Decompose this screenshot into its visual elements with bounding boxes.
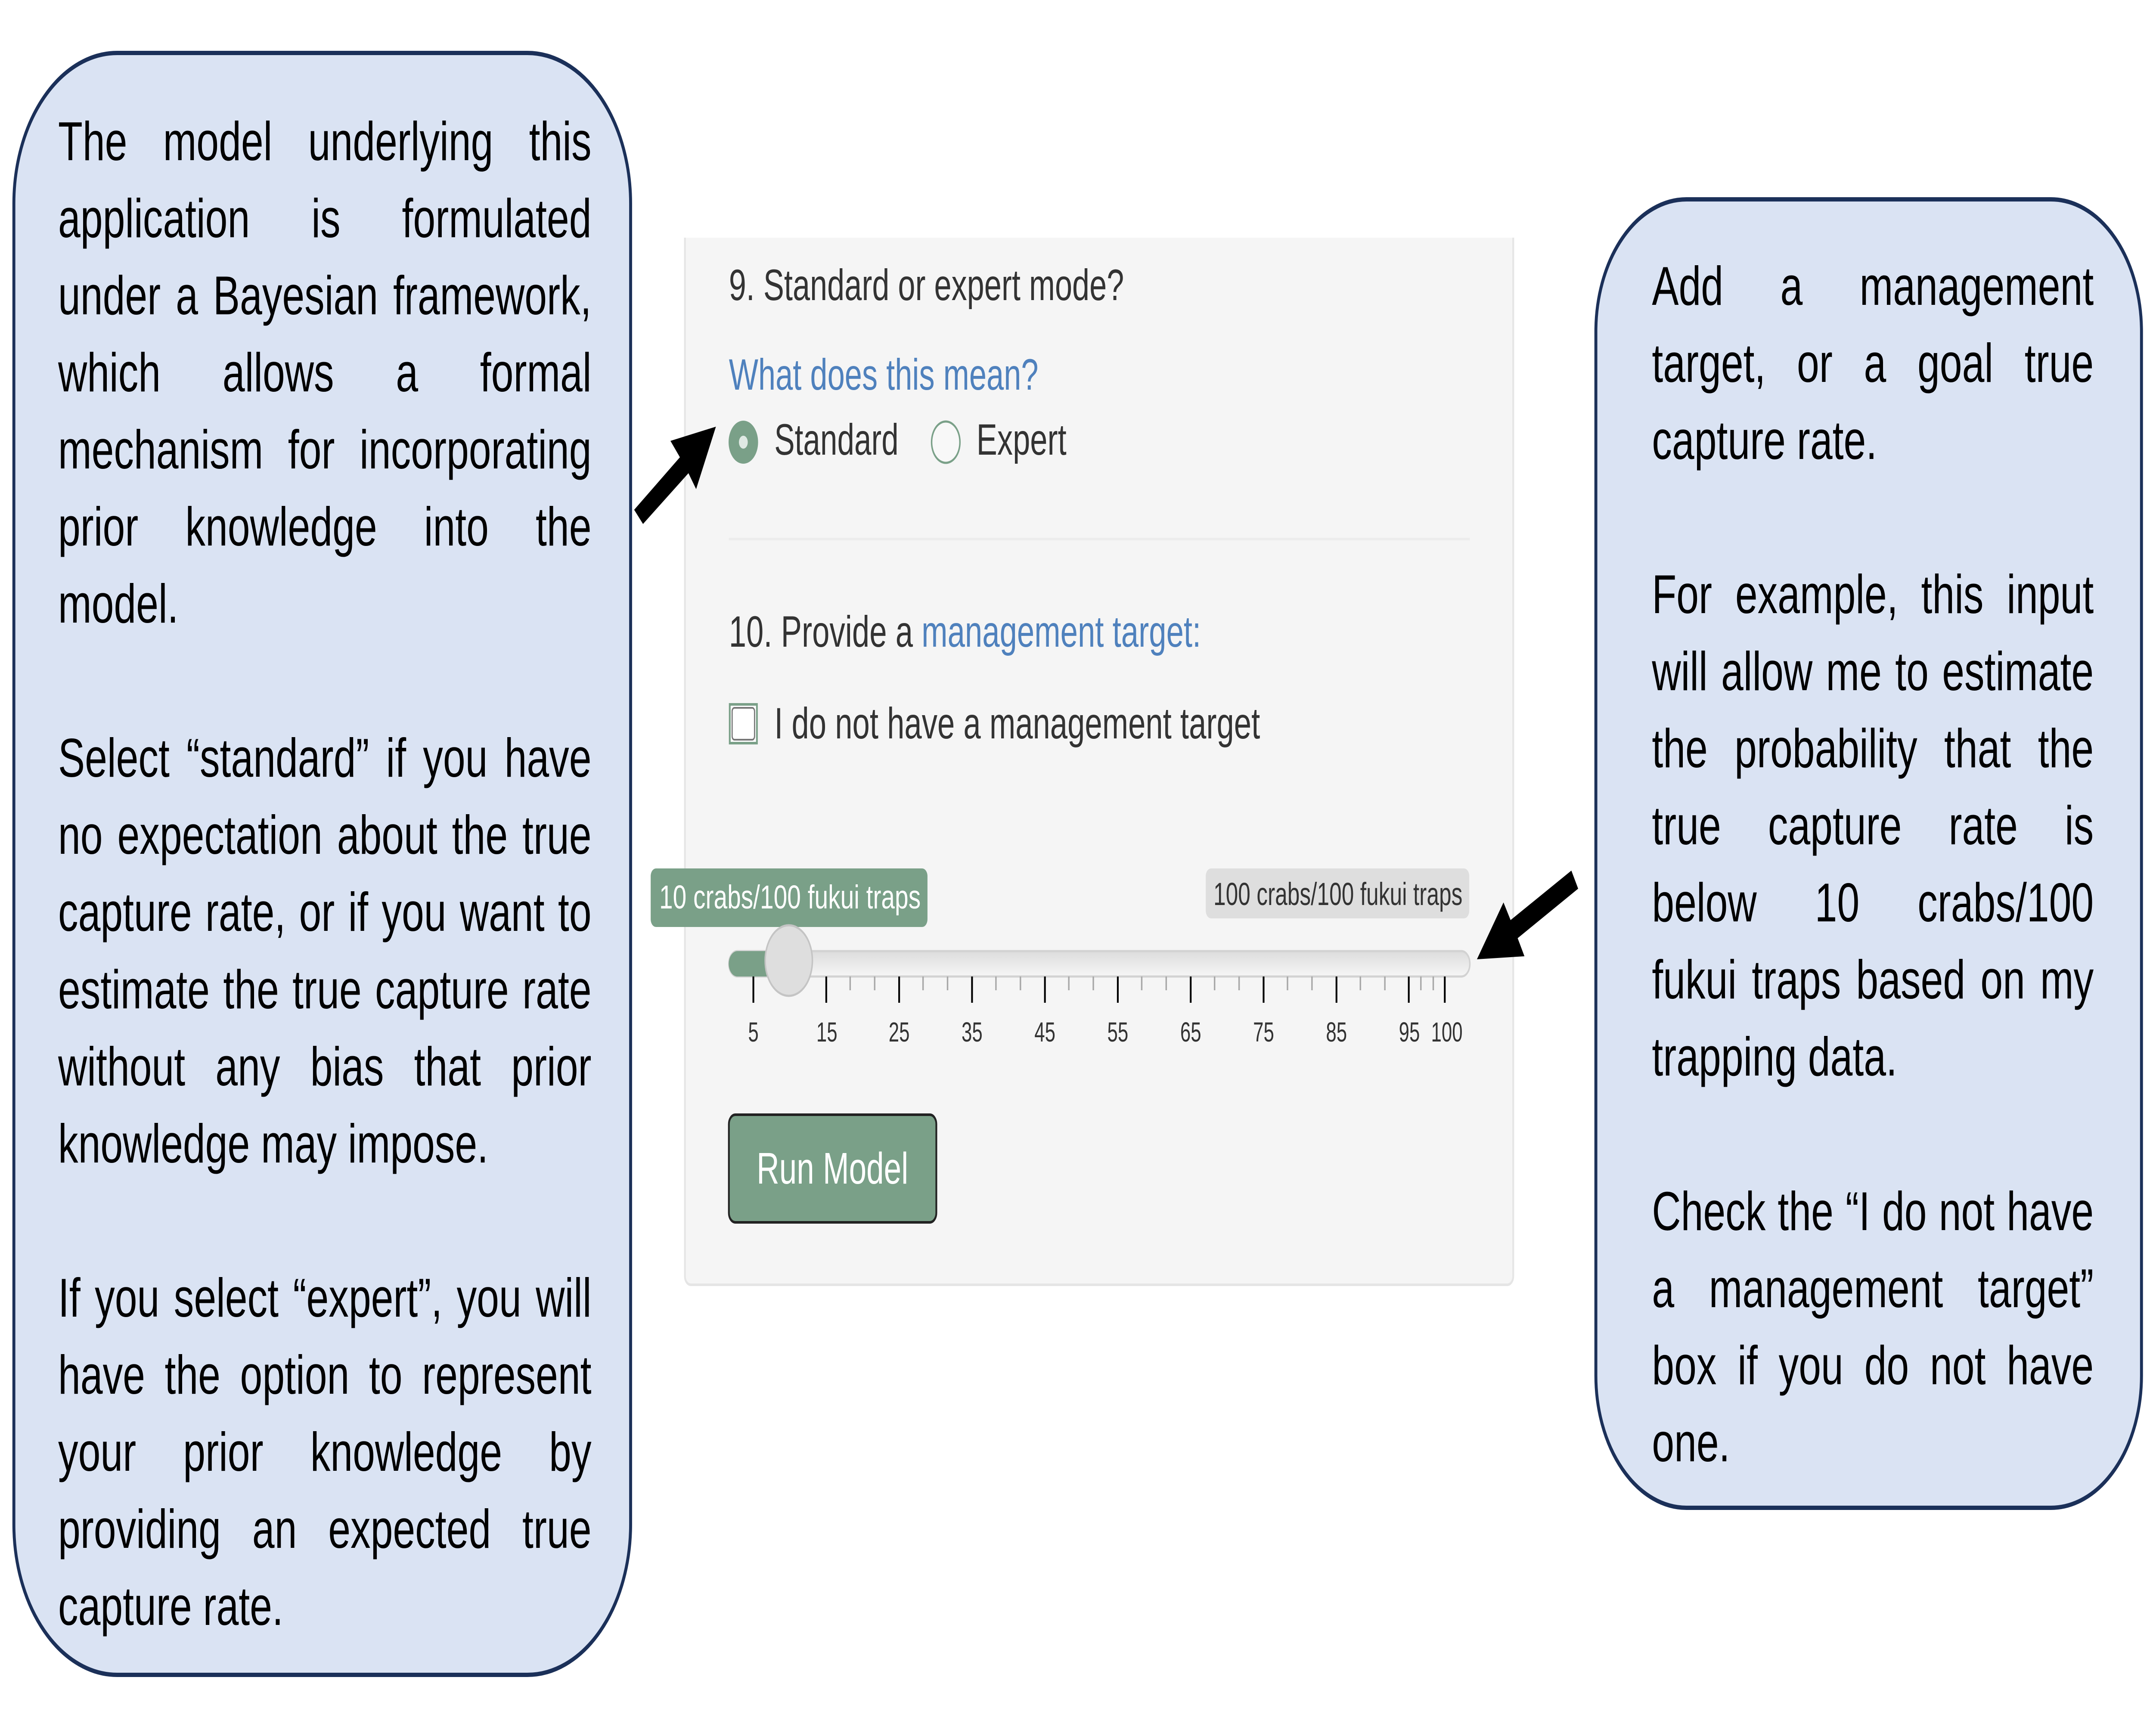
- text block: right callout explanation: [1652, 247, 2130, 1496]
- slider handle: [765, 925, 813, 996]
- slider tick labels: [748, 1017, 1463, 1048]
- text block: right callout explanation: Add a management: [1652, 255, 2094, 316]
- slider track: [729, 951, 1470, 976]
- slider tick labels: 100: [1431, 1017, 1463, 1048]
- text block: right callout explanation: a management target”: [1652, 1258, 2094, 1319]
- slider tick labels: 65: [1180, 1017, 1201, 1048]
- text block: left callout explanation: without any bias that prior: [58, 1036, 592, 1097]
- slider tick labels: 5: [748, 1017, 759, 1048]
- text block: right callout explanation: trapping data.: [1652, 1026, 1897, 1087]
- text block: left callout explanation: capture rate, or if you want to: [58, 881, 592, 942]
- panel: right callout on management target: [1596, 199, 2141, 1508]
- heading: question 9: 9. Standard or expert mode?: [729, 260, 1124, 310]
- text block: left callout explanation: capture rate.: [58, 1575, 283, 1637]
- radio: expert unselected: [932, 415, 1067, 464]
- slider minor ticks: [850, 976, 1433, 990]
- text block: left callout explanation: mechanism for incorporating: [58, 419, 592, 480]
- text block: left callout explanation: model.: [58, 573, 179, 634]
- text block: right callout explanation: the probability that the: [1652, 718, 2094, 779]
- slider tick labels: 75: [1253, 1017, 1274, 1048]
- text block: right callout explanation: will allow me to estimate: [1652, 641, 2094, 702]
- text block: right callout explanation: For example, this input: [1652, 564, 2094, 625]
- panel: application input form: [651, 238, 1513, 1285]
- slider tick labels: 25: [889, 1017, 910, 1048]
- slider: management target: [651, 868, 1470, 1048]
- checkbox: no management target: I do not have a management target: [774, 699, 1260, 748]
- slider tick labels: 45: [1034, 1017, 1055, 1048]
- text block: left callout explanation: prior knowledge into the: [58, 496, 592, 557]
- text block: right callout explanation: capture rate.: [1652, 409, 1877, 471]
- text block: right callout explanation: box if you do not have: [1652, 1335, 2094, 1396]
- slider current value label: 10 crabs/100 fukui traps: [659, 878, 921, 915]
- text block: right callout explanation: target, or a goal true: [1652, 332, 2094, 394]
- arrow: pointing to slider: [1477, 871, 1578, 959]
- text block: left callout explanation: have the option to represent: [58, 1344, 592, 1405]
- slider tick labels: 15: [816, 1017, 838, 1048]
- text block: right callout explanation: fukui traps based on my: [1652, 949, 2094, 1010]
- text block: left callout explanation: your prior knowledge by: [58, 1421, 592, 1482]
- slider current value label: [651, 868, 928, 927]
- radio: expert unselected: Expert: [977, 415, 1067, 464]
- panel: left callout on Bayesian framework and modes: [14, 53, 631, 1675]
- slider filled range: [729, 951, 789, 976]
- text block: right callout explanation: Check the “I do not have: [1652, 1181, 2094, 1242]
- text block: right callout explanation: true capture rate is: [1652, 795, 2094, 856]
- slider maximum label: 100 crabs/100 fukui traps: [1213, 877, 1462, 912]
- button: run model: Run Model: [757, 1144, 908, 1193]
- text block: left callout explanation: knowledge may impose.: [58, 1113, 488, 1174]
- text block: left callout explanation: under a Bayesian framework,: [58, 265, 592, 326]
- arrow: pointing to standard radio: [634, 427, 716, 524]
- slider tick labels: 55: [1108, 1017, 1128, 1048]
- slider ticks: [754, 976, 1445, 1003]
- text block: right callout explanation: below 10 crabs/100: [1652, 872, 2094, 933]
- text block: left callout explanation: estimate the true capture rate: [58, 959, 592, 1020]
- slider tick labels: 85: [1326, 1017, 1347, 1048]
- heading: question 10: 10. Provide a management target:: [729, 607, 1201, 656]
- text block: left callout explanation: Select “standard” if you have: [58, 727, 592, 788]
- slider maximum label: [1206, 868, 1469, 918]
- text block: left callout explanation: The model underlying this: [58, 110, 592, 171]
- text block: left callout explanation: providing an expected true: [58, 1498, 592, 1559]
- slider tick labels: 35: [962, 1017, 983, 1048]
- button: run model: [729, 1115, 936, 1222]
- text block: left callout explanation: If you select “expert”, you will: [58, 1267, 592, 1328]
- text block: left callout explanation: [58, 102, 619, 1661]
- text block: right callout explanation: one.: [1652, 1412, 1730, 1473]
- radio: standard selected: Standard: [774, 415, 899, 464]
- text block: left callout explanation: which allows a formal: [58, 342, 592, 403]
- text block: left callout explanation: no expectation about the true: [58, 804, 592, 865]
- slider tick labels: 95: [1399, 1017, 1420, 1048]
- text block: left callout explanation: application is formulated: [58, 188, 592, 249]
- link: what does this mean: What does this mean?: [729, 350, 1039, 399]
